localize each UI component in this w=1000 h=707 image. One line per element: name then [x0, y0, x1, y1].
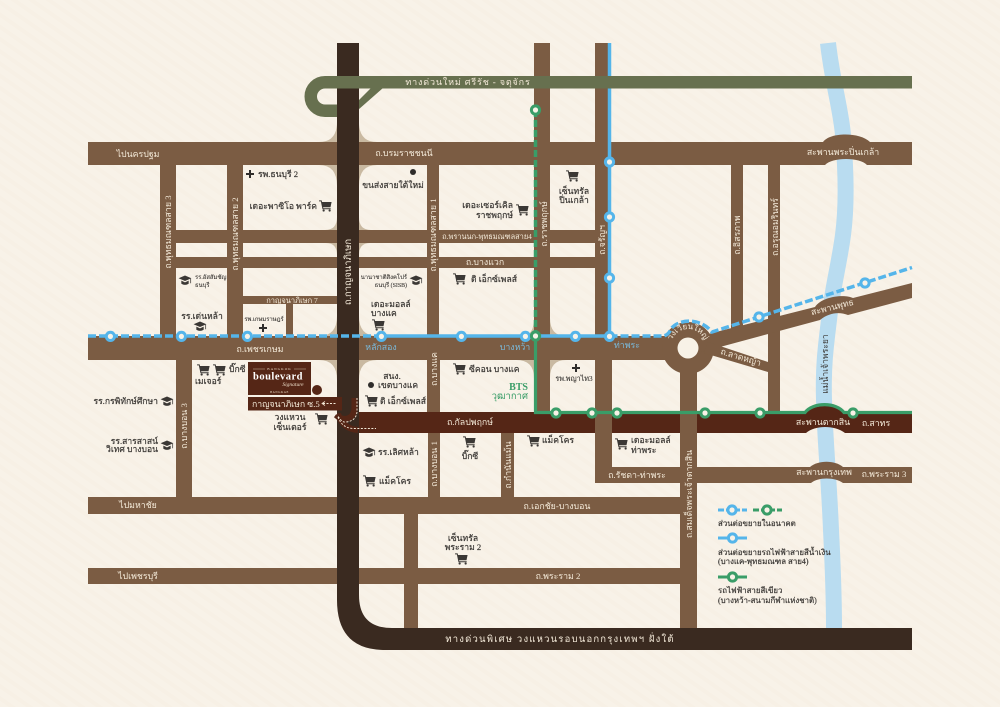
poi: Makro Kanlapaphruek: แม็คโคร	[542, 434, 574, 445]
station label: BTS Wutthakat: วุฒากาศ	[492, 392, 528, 402]
station label: BTS Wutthakat	[492, 382, 528, 402]
legend: green line: (บางหว้า-สนามกีฬาแห่งชาติ)	[718, 596, 817, 605]
green line rail	[536, 110, 912, 412]
project logo: BANGKOK	[267, 367, 292, 371]
poi: Central Rama 2: เซ็นทรัล	[448, 532, 478, 543]
road labels: วงเวียนใหญ่	[668, 324, 710, 340]
poi: Big C Kanlapaphruek: บิ๊กซี	[462, 449, 478, 461]
poi: The Paseo Park: เดอะพาซิโอ พาร์ค	[250, 201, 317, 211]
project location marker	[312, 385, 322, 395]
road labels: ถ.กาญจนาภิเษก	[343, 239, 354, 305]
poi: The Express top: ดิ เอ็กซ์เพลส์	[471, 273, 518, 284]
expressway ramp	[350, 88, 383, 117]
poi: Kornpitak school: รร.กรพิทักษ์ศึกษา	[93, 396, 158, 406]
road labels: สะพานตากสิน	[796, 417, 850, 427]
poi: Bangkae district office: สนง.	[383, 371, 401, 381]
poi: The Mall Thapra: เดอะมอลล์	[631, 435, 671, 445]
poi: Central Pinklao: ปิ่นเกล้า	[559, 194, 589, 205]
poi: The Circle Ratchapruek: ราชพฤกษ์	[476, 210, 513, 220]
road labels: ถ.พระราม 3	[862, 469, 907, 479]
road labels: ถ.กัลปพฤกษ์	[447, 417, 493, 427]
poi: Big C and Major	[195, 362, 246, 386]
poi: Wongwaen Center	[274, 412, 328, 432]
Kanlapaphruek road	[358, 406, 912, 433]
road labels: ถ.พุทธมณฑลสาย 1	[428, 198, 439, 272]
poi: The Express Bangkae	[365, 395, 427, 407]
poi: Central Pinklao: เซ็นทรัล	[559, 185, 589, 196]
road labels: ถ.สาทร	[862, 418, 890, 428]
poi: Kasemrad hospital	[244, 315, 284, 332]
road labels: กาญจนาภิเษก 7	[266, 296, 318, 305]
road labels: ถ.พระราม 2	[536, 571, 580, 581]
crossing roads over Kanlapaphruek	[595, 360, 697, 628]
road labels: ถ.บางแค	[429, 352, 439, 386]
poi: Seacon Bangkae: ซีคอน บางแค	[469, 364, 520, 374]
poi: Denla school: รร.เด่นหล้า	[181, 311, 223, 321]
road labels: ไปนครปฐม	[116, 149, 159, 160]
road labels: แม่น้ำเจ้าพระยา	[818, 334, 830, 394]
legend	[718, 504, 831, 605]
poi: Lertla school: รร.เลิศหล้า	[378, 447, 419, 457]
legend: blue line extension	[718, 532, 831, 566]
outer ring road	[337, 43, 912, 650]
road labels: ถ.จรัญฯ	[597, 225, 607, 255]
poi: The Mall Bangkae: บางแค	[371, 308, 397, 318]
legend: future extension: ส่วนต่อขยายในอนาคต	[718, 519, 796, 528]
poi: The Mall Thapra	[615, 435, 671, 455]
green line stations	[530, 104, 859, 419]
blue line stations	[105, 156, 871, 342]
poi: The Mall Thapra: ท่าพระ	[631, 445, 656, 455]
poi: Wongwaen Center: วงแหวน	[275, 412, 306, 422]
poi: Bangkae district office: เขตบางแค	[378, 380, 418, 390]
river: Chao Phraya	[824, 43, 846, 628]
road labels: ทางด่วนพิเศษ วงแหวนรอบนอกกรุงเทพฯ ฝั่งใต้	[445, 632, 675, 645]
road labels	[116, 76, 907, 645]
road labels: ถ.พุทธมณฑลสาย 3	[163, 195, 174, 269]
road labels: หลักสอง	[365, 342, 397, 352]
road labels: สะพานกรุงเทพ	[796, 467, 852, 478]
poi: Sarasas school: วิเทศ บางบอน	[106, 444, 158, 454]
poi: Assumption school	[179, 273, 226, 289]
poi: SISB school: นานาชาติสิงคโปร์	[361, 273, 407, 281]
poi: Makro Ekachai	[363, 475, 411, 487]
project logo: boulevard	[253, 372, 303, 382]
poi: Denla school	[181, 311, 223, 331]
poi: The Circle Ratchapruek: เดอะเซอร์เคิล	[462, 200, 513, 210]
poi: Big C Kanlapaphruek	[462, 437, 478, 461]
road labels: ถ.เพชรเกษม	[237, 344, 283, 354]
poi: Southern bus terminal	[362, 169, 424, 190]
road labels: ท่าพระ	[614, 340, 640, 350]
poi: The Express Bangkae: ดิ เอ็กซ์เพลส์	[380, 395, 427, 406]
poi: Assumption school: ธนบุรี	[195, 281, 210, 289]
road labels: ไปมหาชัย	[118, 500, 157, 510]
road labels: ถ.ราชพฤกษ์	[539, 201, 549, 247]
poi: Bangkae district office	[368, 371, 418, 390]
poi: Assumption school: รร.อัสสัมชัญ	[195, 273, 226, 281]
poi: The Mall Bangkae	[371, 299, 411, 331]
road labels: สะพานพุทธ	[810, 297, 855, 318]
access road sign and route	[248, 397, 376, 430]
road labels: ถ.บรมราชชนนี	[375, 148, 433, 158]
project logo	[248, 362, 311, 395]
project logo: BANGKAE	[270, 390, 289, 394]
road labels: ถ.สมเด็จพระเจ้าตากสิน	[683, 450, 694, 538]
legend: green line	[718, 571, 817, 605]
poi: Makro Ekachai: แม็คโคร	[379, 475, 411, 486]
road labels: สะพานพระปิ่นเกล้า	[807, 146, 879, 157]
road labels: ถ.อรุณอมรินทร์	[770, 198, 781, 256]
poi: The Mall Bangkae: เดอะมอลล์	[371, 299, 411, 309]
project logo: Signature	[282, 382, 304, 388]
legend: green line: รถไฟฟ้าสายสีเขียว	[718, 586, 782, 595]
legend: blue line extension: ส่วนต่อขยายรถไฟฟ้าสายสีน้ำเงิน	[718, 546, 831, 557]
new expressway loop	[311, 82, 345, 111]
poi: Big C and Major: บิ๊กซี	[229, 362, 246, 374]
road labels: ถ.ลาดหญ้า	[719, 346, 762, 368]
road labels: ถ.อิสรภาพ	[732, 215, 742, 255]
access road sign and route: กาญจนาภิเษก ซ.5	[252, 399, 320, 409]
poi: Big C and Major: เมเจอร์	[195, 376, 222, 386]
road labels: ถ.บางบอน 3	[179, 402, 189, 449]
legend: blue line extension: (บางแค-พุทธมณฑล สาย4)	[718, 557, 809, 566]
poi: Sarasas school	[106, 436, 173, 454]
poi: Makro Kanlapaphruek	[527, 434, 574, 447]
poi: Southern bus terminal: ขนส่งสายใต้ใหม่	[362, 180, 424, 190]
station label: BTS Wutthakat: BTS	[509, 382, 528, 393]
poi: Phyathai 3 hospital: รพ.พญาไท3	[555, 374, 593, 383]
interchange ramps	[319, 122, 566, 380]
poi: SISB school	[361, 273, 422, 289]
road labels: ทางด่วนใหม่ ศรีรัช - จตุจักร	[405, 77, 531, 88]
road labels: ถ.พุทธมณฑลสาย 2	[230, 197, 241, 271]
road labels: ไปเพชรบุรี	[117, 571, 158, 582]
expressway top bar	[325, 76, 912, 88]
road network	[88, 43, 912, 628]
road labels: ถ.บางบอน 1	[429, 441, 439, 487]
poi: Sarasas school: รร.สารสาสน์	[111, 436, 158, 446]
road labels: ถ.เอกชัย-บางบอน	[524, 501, 590, 511]
poi: Central Rama 2	[445, 532, 481, 565]
road labels: ถ.กำนันแม้น	[503, 441, 513, 489]
road labels: ถ.รัชดา-ท่าพระ	[608, 470, 666, 480]
poi: Thonburi 2 hospital	[246, 169, 298, 180]
poi: Phyathai 3 hospital	[555, 364, 593, 383]
blue line rail	[88, 43, 912, 336]
poi: Central Pinklao	[559, 171, 589, 205]
roundabout centre	[678, 338, 698, 358]
poi: Wongwaen Center: เซ็นเตอร์	[274, 421, 307, 432]
poi: The Express top	[453, 273, 518, 285]
poi: Central Rama 2: พระราม 2	[445, 542, 481, 552]
road labels: ถ.พรานนก-พุทธมณฑลสาย4	[442, 232, 532, 241]
poi: The Circle Ratchapruek	[462, 200, 529, 220]
poi: Kasemrad hospital: รพ.เกษมราษฎร์	[244, 315, 284, 323]
poi: Thonburi 2 hospital: รพ.ธนบุรี 2	[258, 169, 298, 180]
poi: SISB school: ธนบุรี (SISB)	[375, 281, 407, 289]
road labels: บางหว้า	[500, 342, 530, 352]
road labels: ถ.บางแวก	[466, 257, 504, 267]
